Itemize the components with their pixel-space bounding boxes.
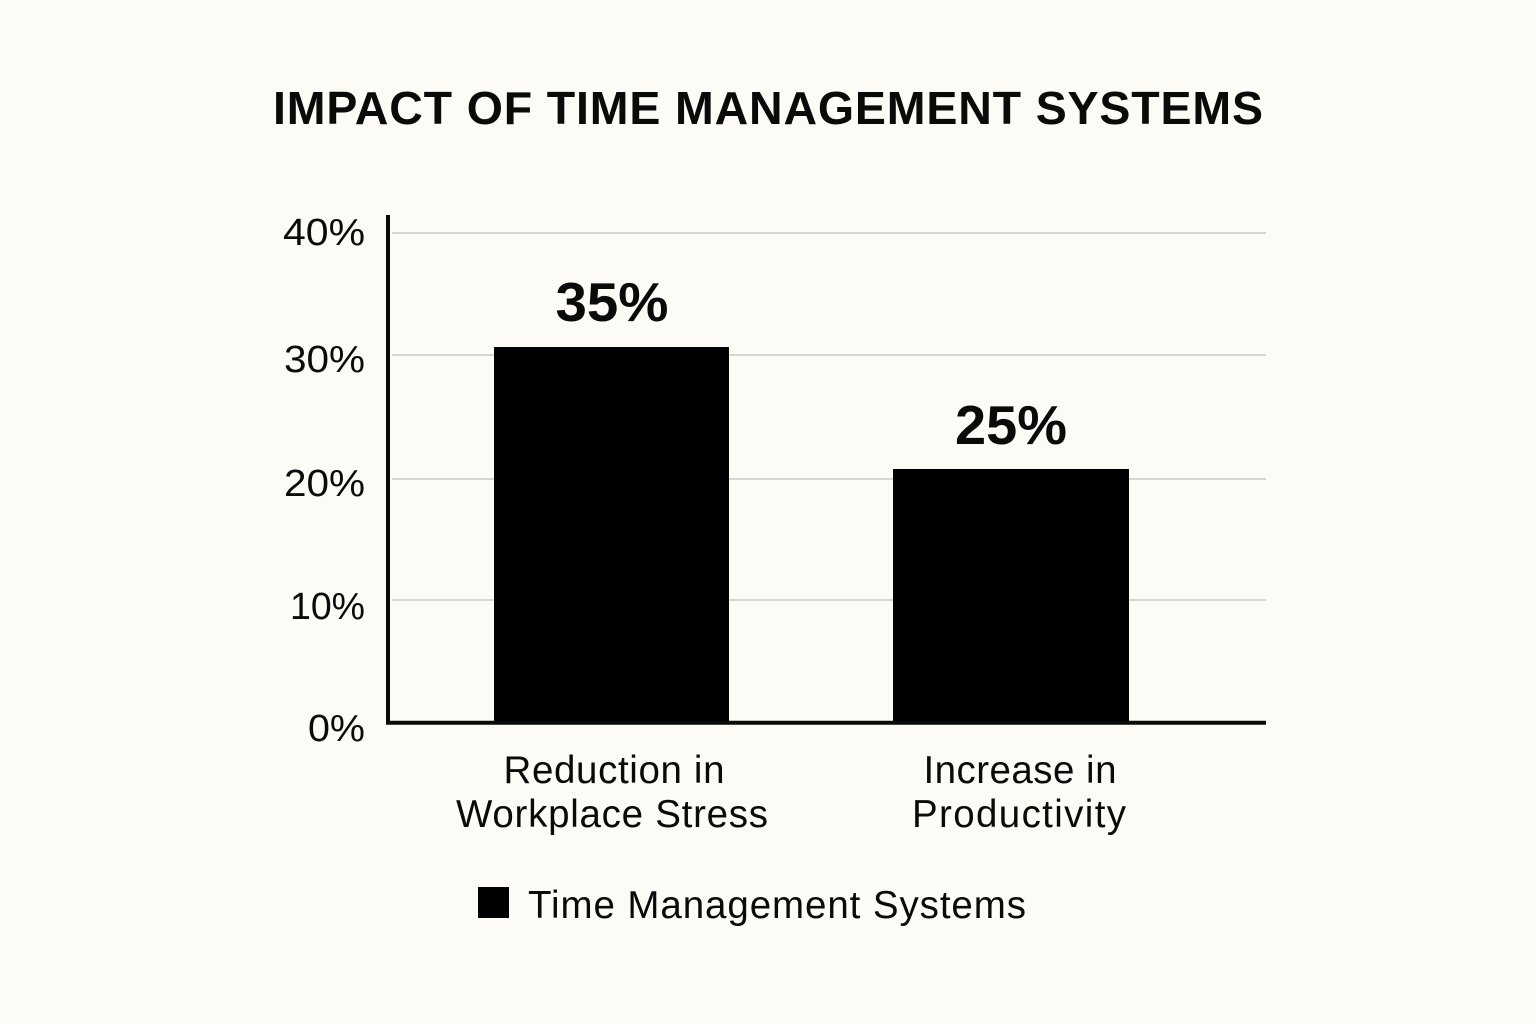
bar: increase in productivity	[893, 469, 1129, 723]
bar chart	[283, 212, 1266, 836]
category label: increase in productivity	[912, 749, 1127, 836]
value label: 25%: 25%	[955, 394, 1067, 456]
axes	[388, 215, 1266, 723]
bar: reduction in workplace stress	[494, 347, 729, 723]
legend label: Time Management Systems	[528, 884, 1026, 927]
y-axis labels: 10%	[290, 586, 365, 628]
category label: reduction in workplace stress	[456, 749, 768, 836]
legend swatch	[478, 887, 509, 918]
y-axis labels: 30%	[284, 339, 365, 381]
value label: 35%: 35%	[556, 271, 668, 333]
y-axis labels: 40%	[283, 212, 365, 254]
title: IMPACT OF TIME MANAGEMENT SYSTEMS	[273, 82, 1263, 134]
category label: reduction in workplace stress: Workplace Stress	[456, 793, 768, 836]
y-axis labels: 20%	[284, 463, 365, 505]
legend	[478, 884, 1026, 927]
category label: increase in productivity: Productivity	[912, 793, 1127, 836]
category label: reduction in workplace stress: Reduction in	[504, 749, 724, 792]
y-axis labels	[283, 212, 365, 750]
category label: increase in productivity: Increase in	[924, 749, 1116, 792]
y-axis labels: 0%	[308, 708, 365, 750]
